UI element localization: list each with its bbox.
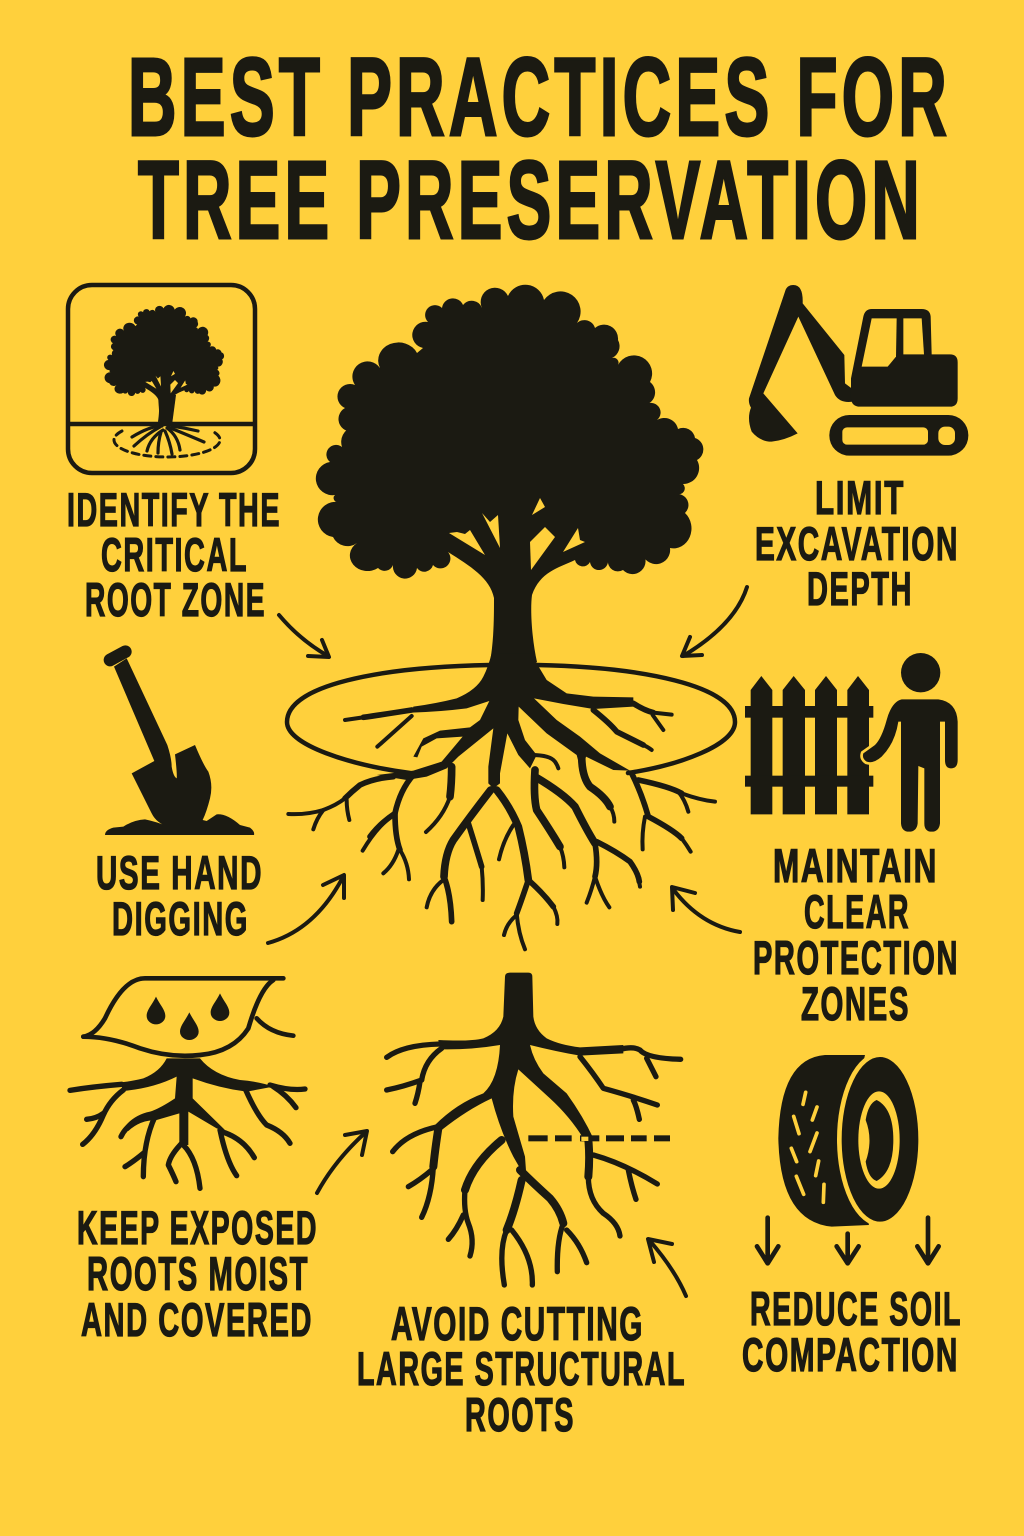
down arrows: [757, 1218, 939, 1263]
label: limit excavation depth: DEPTH: [807, 562, 913, 615]
icon: excavator: [749, 285, 968, 456]
label: avoid cutting large structural roots: [357, 1297, 686, 1441]
label: limit excavation depth: LIMIT: [815, 471, 905, 524]
arrow: excavation depth: [682, 587, 747, 656]
label: avoid cutting large structural roots: ROOTS: [465, 1388, 575, 1441]
moist cover: [83, 978, 293, 1056]
label: use hand digging: USE HAND: [96, 846, 263, 899]
label: keep exposed roots moist and covered: AND COVERED: [81, 1293, 313, 1346]
label: use hand digging: [96, 846, 263, 945]
icon: tire with down arrows: [757, 1055, 939, 1263]
label: reduce soil compaction: [742, 1282, 962, 1381]
tire: [778, 1055, 921, 1227]
title: [128, 36, 951, 262]
label: limit excavation depth: [755, 471, 959, 615]
label: avoid cutting large structural roots: AVOID CUTTING: [391, 1297, 644, 1350]
tree canopy and trunk: [316, 285, 703, 662]
root zone ellipse: [287, 665, 735, 773]
arrow: protection zones: [672, 887, 740, 932]
label: maintain clear protection zones: MAINTAIN: [773, 839, 938, 892]
label: identify the critical root zone: ROOT ZONE: [85, 573, 266, 626]
roots: [70, 1058, 305, 1188]
label: avoid cutting large structural roots: LARGE STRUCTURAL: [357, 1342, 686, 1395]
arrow: structural roots: [648, 1239, 686, 1296]
central tree with root zone ellipse: [287, 285, 735, 949]
arrow: moist roots: [317, 1131, 367, 1193]
label: use hand digging: DIGGING: [112, 892, 249, 945]
icon: critical root zone: [68, 285, 255, 473]
fence: [745, 676, 873, 814]
icon: shovel: [105, 652, 254, 835]
label: identify the critical root zone: CRITICAL: [101, 528, 248, 581]
label: maintain clear protection zones: CLEAR: [804, 885, 910, 938]
label: identify the critical root zone: [67, 483, 281, 626]
icon: exposed roots with moist cover: [70, 978, 305, 1188]
icon: fence and person: [745, 653, 958, 832]
water drops: [147, 993, 229, 1040]
label: keep exposed roots moist and covered: [77, 1201, 318, 1346]
icon: structural roots with cut line: [387, 973, 681, 1285]
label: maintain clear protection zones: ZONES: [801, 977, 910, 1030]
label: maintain clear protection zones: [753, 839, 959, 1030]
arrow: root zone: [279, 615, 329, 657]
arrow: hand digging: [268, 875, 344, 943]
label: keep exposed roots moist and covered: KEEP EXPOSED: [77, 1201, 318, 1254]
label: keep exposed roots moist and covered: ROOTS MOIST: [87, 1247, 309, 1300]
cut line: [528, 1135, 670, 1141]
person: [863, 653, 958, 832]
main tree roots: [288, 653, 715, 949]
label: identify the critical root zone: IDENTIFY THE: [67, 483, 281, 536]
